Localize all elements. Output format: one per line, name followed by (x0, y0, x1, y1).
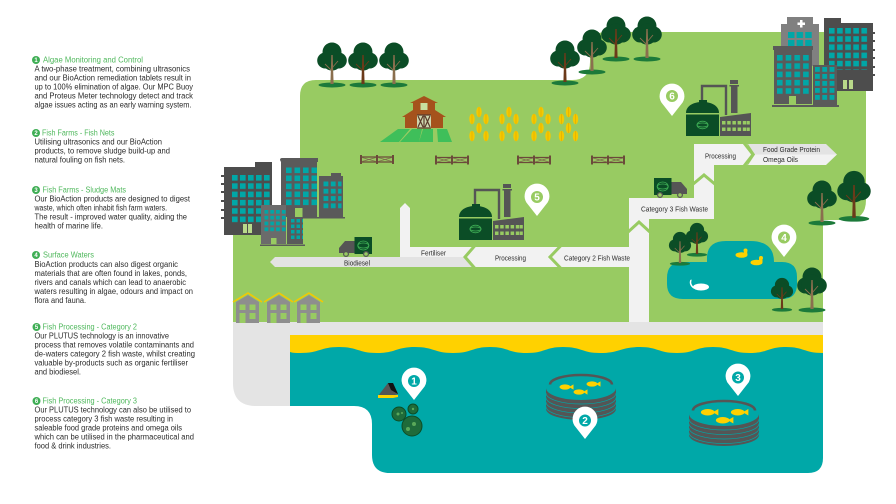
text block 4: surface waters: rivers and canals which can lead to anaerobic (34, 278, 186, 287)
trees: right side (807, 171, 871, 226)
text block 3: sludge mats: health of marine life. (34, 222, 103, 231)
text block 5: category 2 processing: and biodiesel. (34, 368, 81, 377)
left city buildings (221, 158, 345, 246)
trees: around pond (669, 223, 827, 312)
pin 3: 3 (735, 373, 741, 384)
text block 2: fish nets (32, 129, 170, 165)
ducks (736, 248, 763, 265)
text block 6: category 3 processing: Fish Processing - Category 3 (42, 397, 138, 406)
label: fertiliser: Fertiliser (421, 250, 447, 258)
truck: category 3 (654, 178, 687, 197)
trees: top centre row (550, 16, 662, 86)
pond (667, 241, 797, 299)
text block 2: fish nets: natural fouling on fish nets. (34, 156, 125, 165)
text block 5: category 2 processing (32, 323, 195, 377)
text block 4: surface waters: materials that are often found in lakes, ponds, (34, 269, 187, 278)
label: omega oils: Omega Oils (763, 157, 798, 164)
arrow: biodiesel band (270, 257, 480, 267)
text block 5: category 2 processing: 5 (35, 325, 39, 331)
text block 5: category 2 processing: process that removes volatile contaminants and (34, 341, 194, 350)
text block 4: surface waters: BioAction products can also digest organic (34, 260, 178, 269)
text block 6: category 3 processing: process category 3 fish waste resulting in (34, 415, 173, 424)
arrow: food grade top band (748, 144, 837, 154)
text block 2: fish nets: Utilising ultrasonics and our BioAction (34, 138, 162, 147)
text block 4: surface waters: waters resulting in algae, odours and impact on (34, 287, 193, 296)
text block 4: surface waters: 4 (34, 253, 38, 259)
text block 5: category 2 processing: Fish Processing - Category 2 (42, 323, 138, 332)
label: biodiesel: Biodiesel (344, 260, 370, 268)
text block 2: fish nets: products, to remove sludge build-up and (34, 147, 170, 156)
pin 6: 6 (669, 92, 675, 102)
text block 4: surface waters (32, 251, 193, 305)
pin 4: 4 (781, 233, 787, 244)
text block 2: fish nets: Fish Farms - Fish Nets (42, 129, 114, 138)
arrow: fertiliser branch (400, 203, 480, 257)
fences (360, 155, 625, 164)
arrow: omega oils lower band (748, 154, 837, 165)
pin 6 (660, 84, 684, 116)
text block 3: sludge mats: The result - improved water quality, aiding the (34, 213, 187, 222)
processing plant 5 (459, 184, 524, 240)
shoreline wave (290, 335, 823, 353)
text block 5: category 2 processing: de-waters category 2 fish waste, whilst creating (34, 350, 195, 359)
swan (690, 280, 709, 290)
label: category 2 fish waste: Category 2 Fish Waste (564, 256, 630, 262)
label: processing upper: Processing (705, 154, 736, 160)
text block 3: sludge mats: 3 (34, 188, 38, 194)
text block 5: category 2 processing: valuable by-products such as organic fertiliser (34, 359, 188, 368)
text block 3: sludge mats: Fish Farms - Sludge Mats (42, 186, 126, 195)
right hospital and city buildings (772, 17, 875, 107)
algae cells (392, 404, 422, 436)
arrow: category 2 band (465, 247, 629, 267)
text block 3: sludge mats: Our BioAction products are designed to digest (34, 195, 191, 204)
text block 1: algae monitoring (32, 56, 193, 110)
left column: descriptions (32, 56, 195, 451)
text block 6: category 3 processing: 6 (35, 399, 39, 405)
pin 5 (525, 184, 549, 216)
buoy (378, 383, 398, 398)
text block 6: category 3 processing (32, 397, 194, 451)
truck: biodiesel (339, 237, 372, 256)
fish cage 3 (689, 401, 759, 446)
text block 3: sludge mats (32, 186, 191, 231)
coast road (233, 322, 823, 406)
text block 1: algae monitoring: up to 100% elimination of algae. Our MPC Buoy (34, 83, 193, 92)
pin 1: 1 (411, 376, 417, 388)
text block 1: algae monitoring: A two-phase treatment, combining ultrasonics (34, 65, 190, 74)
text block 6: category 3 processing: saleable food grade proteins and omega oils (34, 424, 182, 433)
pin 2 (573, 407, 597, 439)
houses (233, 293, 323, 323)
trees: top left row (317, 42, 409, 88)
arrow: vertical road to category 3 (629, 144, 753, 322)
land: green area (233, 32, 866, 323)
text block 6: category 3 processing: Our PLUTUS technology can also be utilised to (34, 406, 192, 415)
pin 2: 2 (582, 416, 588, 427)
text block 6: category 3 processing: food & drink industries. (34, 442, 111, 451)
flow arrows (270, 143, 837, 322)
pin 3 (726, 364, 750, 396)
text block 1: algae monitoring: Algae Monitoring and Control (43, 56, 143, 65)
text block 1: algae monitoring: 1 (34, 58, 38, 64)
wheat crops (469, 107, 578, 141)
barn with furrows (380, 96, 452, 142)
text block 1: algae monitoring: and our BioAction remediation tablets result in (34, 74, 191, 83)
text block 2: fish nets: 2 (34, 131, 38, 137)
sea (290, 336, 823, 473)
text block 6: category 3 processing: which can be utilised in the pharmaceutical and (34, 433, 194, 442)
processing plant 6 (686, 80, 751, 136)
text block 4: surface waters: flora and fauna. (34, 296, 86, 305)
label: processing lower: Processing (495, 256, 526, 262)
label: food grade protein: Food Grade Protein (763, 147, 820, 154)
label: category 3 fish waste: Category 3 Fish Waste (641, 206, 708, 214)
pin 5: 5 (534, 192, 540, 204)
text block 1: algae monitoring: algae issues acting as an early warning system. (34, 101, 192, 110)
pin 1 (402, 368, 426, 400)
fish cage 2 (546, 375, 616, 420)
text block 5: category 2 processing: Our PLUTUS technology is an innovative (34, 332, 169, 341)
text block 1: algae monitoring: and Proteus Meter technology detect and track (34, 92, 193, 101)
text block 4: surface waters: Surface Waters (43, 251, 94, 260)
text block 3: sludge mats: waste, which often inhabit fish farm waters. (34, 204, 167, 213)
pin 4 (772, 225, 796, 257)
